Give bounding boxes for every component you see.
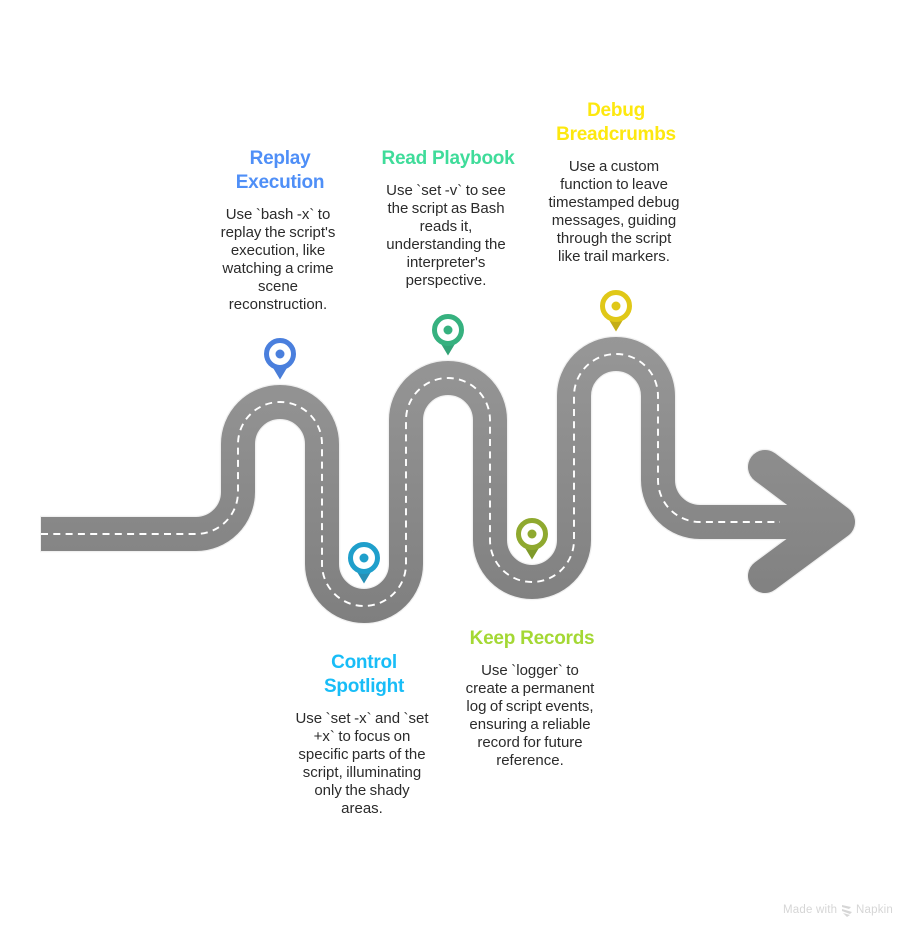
text: debug breadcrumbs description: function to leave [560,176,668,193]
text: replay execution description: scene [258,278,298,295]
text: replay execution description: Use `bash -x` to [226,206,330,223]
heading: control spotlight [324,652,405,697]
pin: read playbook [434,316,462,356]
text: replay execution description: reconstruction. [229,296,327,313]
heading: debug breadcrumbs: Breadcrumbs [556,124,676,145]
heading: read playbook: Read Playbook [382,148,515,169]
text: debug breadcrumbs description: like trail markers. [558,248,670,265]
text: debug breadcrumbs description: messages, guiding [552,212,676,229]
heading: control spotlight: Spotlight [324,676,405,697]
text: keep records description: ensuring a reliable [469,716,591,733]
text: keep records description: Use `logger` to [481,662,579,679]
text: control spotlight description: Use `set -x` and `set [295,710,429,727]
text: control spotlight description: only the shady [314,782,410,799]
text: replay execution description [221,206,335,313]
text: keep records description: log of script events, [466,698,594,715]
text: read playbook description: interpreter's [407,254,485,271]
text: control spotlight description: script, illuminating [303,764,421,781]
text: replay execution description: execution, like [231,242,325,259]
text: control spotlight description: specific parts of the [298,746,426,763]
watermark: made with napkin: Made with [783,904,837,916]
text: keep records description [466,662,595,769]
text: debug breadcrumbs description: through the script [557,230,672,247]
pin: replay execution [266,340,294,380]
heading: replay execution: Replay [250,148,311,169]
text: read playbook description [386,182,506,289]
text: replay execution description: watching a crime [221,260,334,277]
text: control spotlight description: +x` to focus on [314,728,410,745]
heading: keep records: Keep Records [470,628,594,649]
text: debug breadcrumbs description: Use a custom [569,158,659,175]
heading: control spotlight: Control [331,652,397,673]
text: control spotlight description: areas. [341,800,383,817]
pin: debug breadcrumbs [602,292,630,332]
heading: debug breadcrumbs [556,100,676,145]
text: replay execution description: replay the script's [221,224,335,241]
text: read playbook description: perspective. [406,272,486,289]
text: keep records description: create a permanent [466,680,595,697]
text: debug breadcrumbs description: timestamped debug [548,194,680,211]
text: debug breadcrumbs description [548,158,680,265]
text: control spotlight description [295,710,429,817]
watermark: made with napkin: Napkin [856,904,893,916]
road with arrow [40,354,838,606]
text: read playbook description: the script as Bash [387,200,505,217]
pin: control spotlight [350,544,378,584]
text: read playbook description: reads it, [420,218,472,235]
heading: replay execution: Execution [236,172,324,193]
heading: replay execution [236,148,324,193]
heading: debug breadcrumbs: Debug [587,100,645,121]
watermark: made with napkin [783,904,893,917]
text: keep records description: reference. [496,752,564,769]
text: keep records description: record for future [477,734,583,751]
text: read playbook description: understanding the [386,236,506,253]
text: read playbook description: Use `set -v` to see [386,182,506,199]
pin: keep records [518,520,546,560]
